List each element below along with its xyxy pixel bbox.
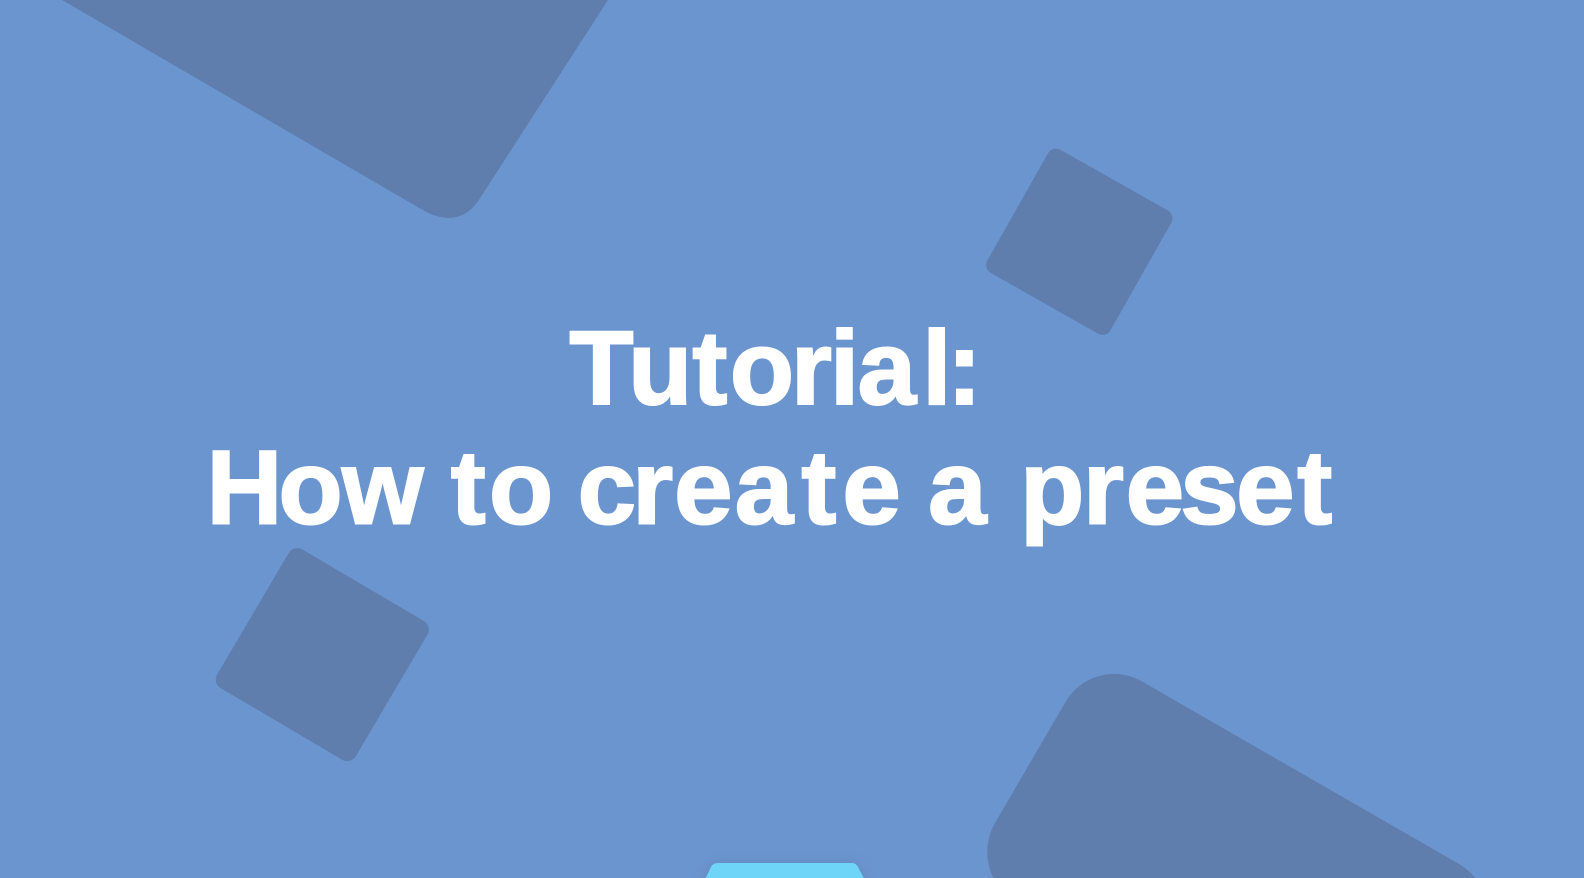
shape: bottom-right large rounded square xyxy=(987,674,1480,878)
title xyxy=(206,310,1332,547)
shape: top-left large rounded square xyxy=(62,0,608,218)
shape: lower-left small rounded square xyxy=(212,544,433,765)
title line 2: How to create a preset xyxy=(206,430,1332,547)
shape: upper-right small rounded square xyxy=(983,145,1176,338)
bottom tab: cyan button top xyxy=(700,863,870,878)
title line 1: Tutorial: xyxy=(569,310,982,427)
